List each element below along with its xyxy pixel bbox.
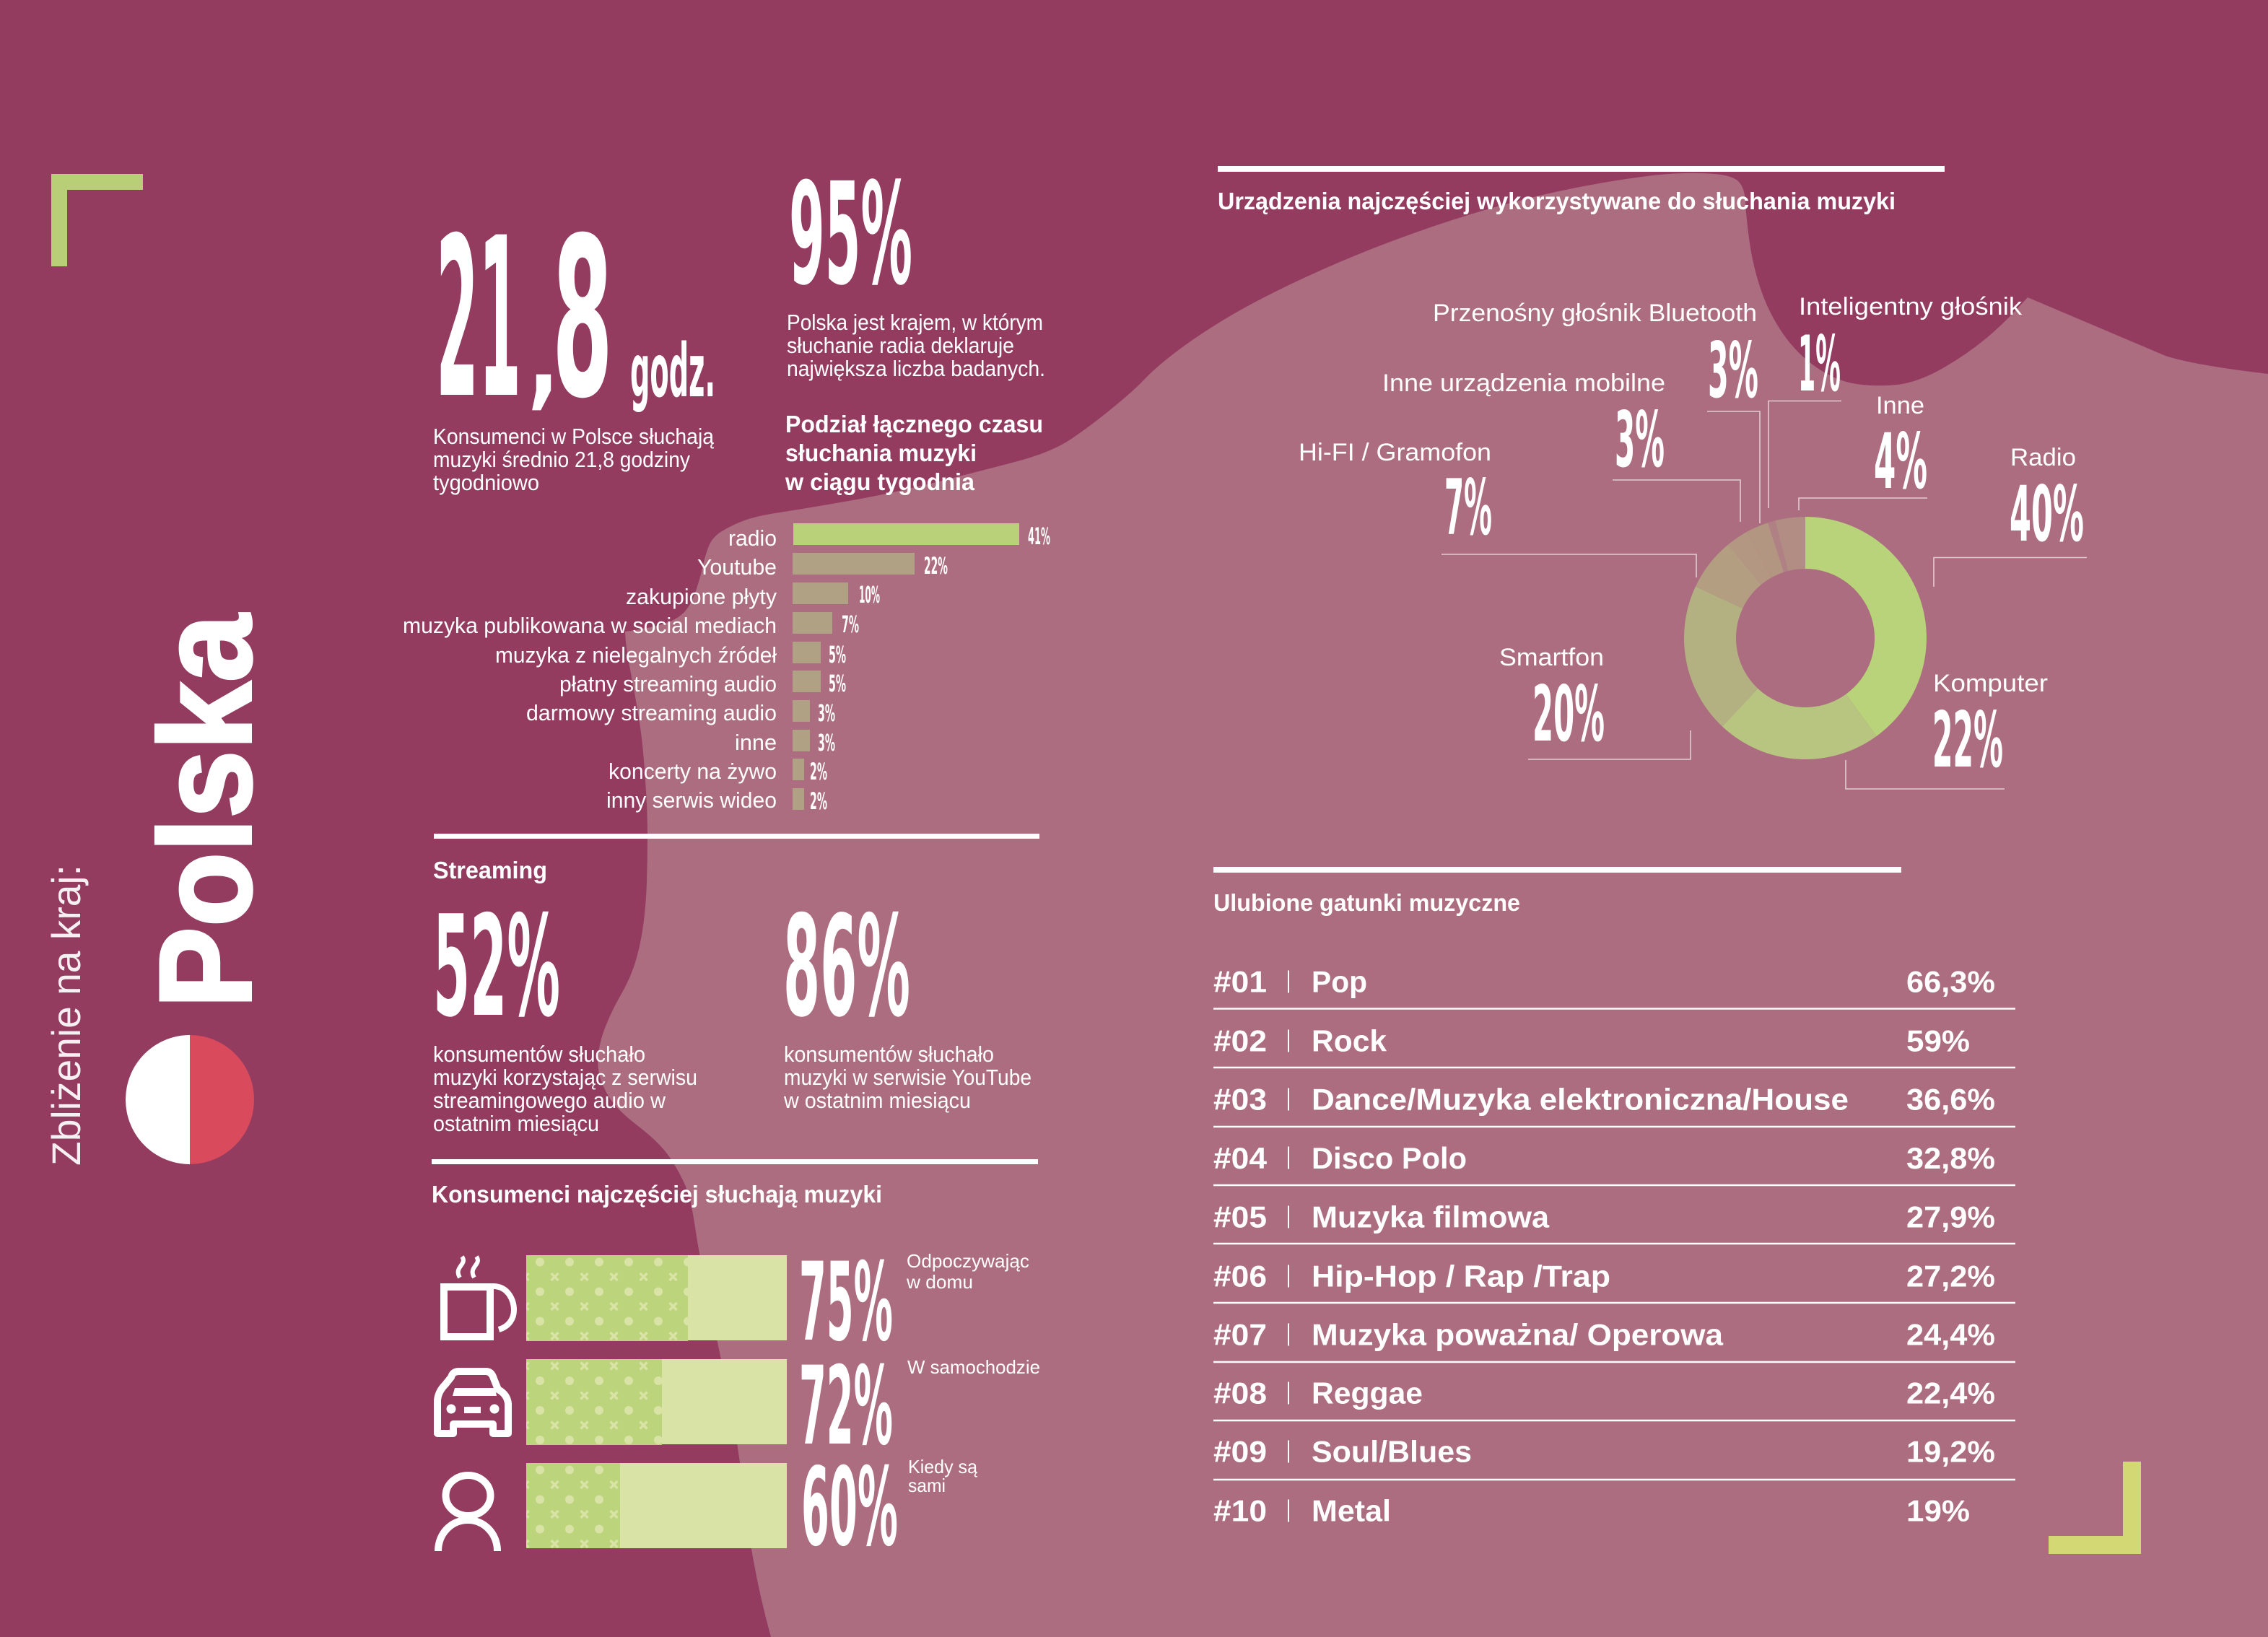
row 7: 24,4% xyxy=(1906,1318,1995,1351)
donut label: Hi-Fi / Gramofon xyxy=(1299,439,1492,552)
text: YouTube xyxy=(783,1042,1031,1113)
text: streaming audio: streamingowego audio w xyxy=(433,1088,666,1113)
bar values: 5% xyxy=(829,641,846,668)
caption: in the car: W samochodzie xyxy=(907,1356,1040,1378)
row 8 xyxy=(1213,1376,1995,1410)
text: radio statement: Polska jest krajem, w którym xyxy=(787,310,1043,335)
caption: alone: sami xyxy=(908,1475,946,1496)
row 2: Rock xyxy=(1312,1023,1387,1058)
subtitle: Zbliżenie na kraj: Zbliżenie na kraj: xyxy=(43,865,89,1166)
text: 7% xyxy=(1444,463,1492,552)
row 10: 19% xyxy=(1906,1494,1970,1527)
donut label: Inteligentny głośnik: Inteligentny głośnik xyxy=(1799,293,2023,320)
bar labels: darmowy streaming audio xyxy=(526,700,777,725)
text: 95% xyxy=(789,152,912,316)
text: 86% xyxy=(783,886,910,1048)
bar labels: inny serwis wideo xyxy=(606,787,777,813)
donut label: Inne: Inne xyxy=(1876,392,1924,419)
text: listening hours: tygodniowo xyxy=(433,470,539,495)
row 3: Dance/Muzyka elektroniczna/House xyxy=(1312,1083,1849,1116)
bar labels: muzyka z nielegalnych źródeł xyxy=(495,642,777,668)
text: 4% xyxy=(1874,417,1927,506)
donut label: Hi-Fi / Gramofon: Hi-FI / Gramofon xyxy=(1299,439,1491,466)
row 1: 66,3% xyxy=(1906,964,1995,999)
row 2: 59% xyxy=(1906,1023,1970,1058)
text: radio statement: słuchanie radia deklaruje xyxy=(787,333,1014,358)
donut label: Radio: Radio xyxy=(2010,444,2076,471)
segment: Inne 4% xyxy=(1775,517,1805,571)
donut label: Komputer: 22% xyxy=(1932,696,2003,785)
text: radio statement: największa liczba badanych. xyxy=(787,356,1045,381)
row 8: Reggae xyxy=(1312,1376,1423,1410)
row 10: Metal xyxy=(1312,1494,1391,1527)
row 2 xyxy=(1213,1023,1970,1058)
bar labels: radio xyxy=(728,525,777,551)
row 6 xyxy=(1213,1259,1995,1293)
heading: listening time split: w ciągu tygodnia xyxy=(785,468,975,495)
bar: alone xyxy=(526,1463,787,1548)
segment: Smartfon 20% xyxy=(1684,586,1758,726)
donut label: Inne xyxy=(1874,392,1927,506)
bar values xyxy=(810,523,1050,815)
row 8: 22,4% xyxy=(1906,1376,1995,1410)
text: 3% xyxy=(1708,326,1758,415)
row 4: 32,8% xyxy=(1906,1141,1995,1175)
row 4: #04 xyxy=(1213,1141,1268,1175)
bar labels: Youtube xyxy=(697,554,777,580)
bar values: 5% xyxy=(829,670,846,697)
icon: mug xyxy=(444,1257,514,1337)
text: streaming audio: muzyki korzystając z serwisu xyxy=(433,1065,697,1090)
row 3: 36,6% xyxy=(1906,1083,1995,1116)
row 1: Pop xyxy=(1312,964,1367,999)
caption: alone xyxy=(908,1456,978,1496)
donut label: Radio xyxy=(2010,444,2084,559)
heading: when consumers listen: Konsumenci najczęściej słuchają muzyki xyxy=(432,1181,882,1208)
icon: Polish flag circle xyxy=(126,1035,254,1164)
text: YouTube: muzyki w serwisie YouTube xyxy=(784,1065,1031,1090)
bar values: 3% xyxy=(818,729,835,756)
text: listening hours: Konsumenci w Polsce słuchają xyxy=(433,424,715,449)
icon: car xyxy=(437,1371,508,1433)
bar labels: płatny streaming audio xyxy=(559,671,777,697)
text: listening hours xyxy=(433,424,715,495)
bar labels: inne xyxy=(735,730,777,755)
row 5: 27,9% xyxy=(1906,1200,1995,1234)
donut label: Inteligentny głośnik: 1% xyxy=(1798,320,1841,409)
row 5 xyxy=(1213,1200,1995,1234)
row 6: Hip-Hop / Rap /Trap xyxy=(1312,1259,1610,1293)
text: 72% xyxy=(799,1344,893,1470)
segment: Radio 40% xyxy=(1805,517,1927,736)
row 7: #07 xyxy=(1213,1318,1267,1351)
text: 75% xyxy=(799,1240,893,1366)
row 7 xyxy=(1213,1318,1995,1351)
row 6: #06 xyxy=(1213,1259,1267,1293)
caption: at home: w domu xyxy=(906,1271,973,1293)
row 10 xyxy=(1213,1494,1970,1527)
row 6: 27,2% xyxy=(1906,1259,1995,1293)
bar chart: weekly listening time xyxy=(403,523,1050,815)
row 4: Disco Polo xyxy=(1312,1141,1467,1175)
bar values: 7% xyxy=(842,611,859,638)
corner bracket: top left xyxy=(51,174,143,266)
row 5: #05 xyxy=(1213,1200,1267,1234)
table: favourite genres xyxy=(1213,964,2015,1527)
caption: at home: Odpoczywając xyxy=(907,1250,1029,1272)
heading: listening time split: Podział łącznego czasu xyxy=(785,411,1043,437)
row 1 xyxy=(1213,964,1995,999)
text: listening hours: muzyki średnio 21,8 godziny xyxy=(433,447,690,472)
bar labels: zakupione płyty xyxy=(626,584,777,609)
row 2: #02 xyxy=(1213,1023,1267,1058)
text: streaming audio: ostatnim miesiącu xyxy=(433,1111,599,1136)
donut label: Przenośny głośnik Bluetooth: Przenośny głośnik Bluetooth xyxy=(1433,300,1757,327)
row 9: Soul/Blues xyxy=(1312,1435,1472,1468)
row 3: #03 xyxy=(1213,1083,1267,1116)
donut chart: devices xyxy=(1684,517,1927,759)
donut label: Inne urządzenia mobilne: Inne urządzenia mobilne xyxy=(1382,370,1665,397)
row 1: #01 xyxy=(1213,964,1267,999)
text: 52% xyxy=(433,886,560,1048)
donut label: Inteligentny głośnik xyxy=(1798,293,2023,409)
stat: 21,8 godz.: , xyxy=(528,295,559,421)
text: radio statement xyxy=(787,310,1045,381)
row 5: Muzyka filmowa xyxy=(1312,1200,1550,1234)
segment: Hi-Fi 7% xyxy=(1696,545,1761,608)
row 10: #10 xyxy=(1213,1494,1267,1527)
donut label: Komputer: Komputer xyxy=(1933,670,2048,697)
leader lines xyxy=(1442,401,2087,789)
icon: person xyxy=(438,1475,497,1551)
text: streaming audio: konsumentów słuchało xyxy=(433,1042,645,1067)
heading: Streaming: Streaming xyxy=(433,857,547,883)
segment: Inne urządzenia mobilne 3% xyxy=(1728,532,1772,585)
text: 3% xyxy=(1615,396,1665,484)
row 9: 19,2% xyxy=(1906,1435,1995,1468)
donut label: Przenośny głośnik Bluetooth xyxy=(1433,300,1758,415)
text: 20% xyxy=(1532,670,1605,759)
row 7: Muzyka poważna/ Operowa xyxy=(1312,1318,1724,1351)
heading: devices: Urządzenia najczęściej wykorzystywane do słuchania muzyki xyxy=(1218,188,1896,214)
segment: Inteligentny głośnik 1% xyxy=(1768,520,1788,572)
segment: Przenośny głośnik 3% xyxy=(1747,523,1784,577)
row 9 xyxy=(1213,1435,1995,1468)
bar labels: muzyka publikowana w social mediach xyxy=(403,613,777,638)
donut label: Inne urządzenia mobilne xyxy=(1382,370,1665,484)
text: godz. xyxy=(630,328,715,414)
text: YouTube: w ostatnim miesiącu xyxy=(783,1088,971,1113)
bar values: 2% xyxy=(810,787,827,815)
donut label: Smartfon: Smartfon xyxy=(1499,644,1604,671)
row 3 xyxy=(1213,1083,1995,1116)
stat: 21,8 godz.: 8 xyxy=(552,191,613,447)
row 4 xyxy=(1213,1141,1995,1175)
bar: at home xyxy=(526,1255,787,1341)
heading: listening time split xyxy=(785,411,1043,495)
bar labels xyxy=(403,525,777,813)
caption: at home xyxy=(906,1250,1029,1293)
text: 41% xyxy=(1028,523,1050,550)
heading: listening time split: słuchania muzyki xyxy=(785,440,977,466)
caption: alone: Kiedy są xyxy=(908,1456,978,1477)
bar values: 10% xyxy=(859,581,880,608)
text: YouTube: konsumentów słuchało xyxy=(784,1042,994,1067)
bar labels: koncerty na żywo xyxy=(609,759,777,784)
text: streaming audio xyxy=(433,1042,697,1136)
bar values: 22% xyxy=(924,552,948,580)
title: country xyxy=(43,614,279,1166)
row 9: #09 xyxy=(1213,1435,1267,1468)
donut label: Smartfon xyxy=(1499,644,1605,759)
donut label: Komputer xyxy=(1932,670,2048,785)
bar values: 3% xyxy=(818,699,835,727)
text: 40% xyxy=(2010,470,2084,559)
heading: favourite genres: Ulubione gatunki muzyczne xyxy=(1213,889,1520,916)
text: 60% xyxy=(801,1445,898,1571)
stat: 21,8 godz.: 21 xyxy=(436,191,521,447)
bar: in the car xyxy=(526,1359,787,1445)
segment: Komputer 22% xyxy=(1722,689,1877,759)
corner bracket: bottom right xyxy=(2049,1462,2141,1554)
bars xyxy=(793,523,1019,810)
background light shape xyxy=(598,173,2268,1637)
row 8: #08 xyxy=(1213,1376,1267,1410)
bar values: 2% xyxy=(810,758,827,785)
heading: Polska: Polska xyxy=(133,614,279,1008)
